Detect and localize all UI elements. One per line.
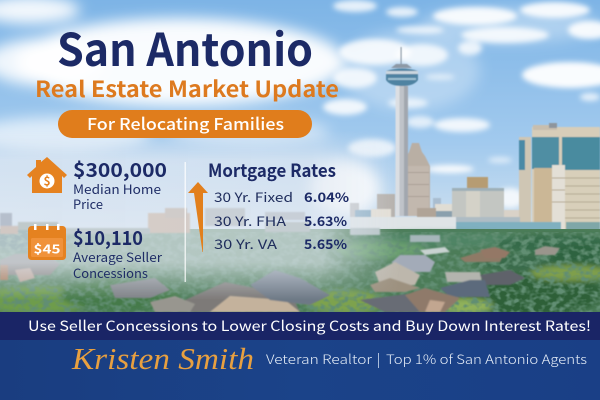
pill: for relocating families: For Relocating Families [87,111,284,135]
convention centre low building [350,217,600,236]
stat label: Average Seller [73,247,162,266]
arrow [188,182,208,252]
right tower [519,123,600,232]
stat value: $10,110 [73,222,143,251]
stat label: Price [73,194,103,213]
mid hotel building [452,177,504,217]
stat: median home price [27,154,167,213]
title: San Antonio [57,14,313,79]
sky background [0,0,600,240]
rate row: FHA: 30 Yr. FHA [214,211,286,230]
rate row: FHA [214,211,348,230]
banner: Use Seller Concessions to Lower Closing Costs and Buy Down Interest Rates! [28,316,591,336]
rate row: VA [214,234,348,253]
stat value: $300,000 [73,154,167,183]
tree masses [0,228,600,316]
foliage texture [0,232,600,312]
agent tagline: Top 1% of San Antonio Agents [386,349,587,368]
heading: Mortgage Rates [208,157,336,183]
neighbourhood ground [0,208,600,316]
rate row: fixed: 30 Yr. Fixed [214,187,293,206]
pill: for relocating families [58,110,312,138]
pale veil behind stats [0,130,400,300]
rate row: FHA: 5.63% [304,211,348,230]
mortgage rates panel [188,157,350,253]
agent tagline: Veteran Realtor [266,349,372,368]
footer background [0,340,600,400]
agent tagline [266,349,587,368]
icon: house with dollar sign: $ [43,172,51,190]
clouds [0,0,600,216]
subtitle: Real Estate Market Update [35,72,339,104]
rate row: fixed: 6.04% [304,187,350,206]
divider [185,162,186,282]
stat label: Median Home [73,179,161,198]
stat label: Concessions [73,263,148,282]
building behind tower [407,143,436,218]
rate row: fixed [214,187,350,206]
stat: average seller concessions [28,222,162,282]
Tower of the Americas [386,47,418,216]
far small buildings [350,194,520,220]
rate row: VA: 30 Yr. VA [214,234,277,253]
icon: calendar with $45: $45 [34,238,60,258]
rate row: VA: 5.65% [304,234,348,253]
agent name: Kristen Smith [71,341,254,376]
skyline [350,47,600,236]
houses [0,208,560,312]
banner [0,312,600,340]
